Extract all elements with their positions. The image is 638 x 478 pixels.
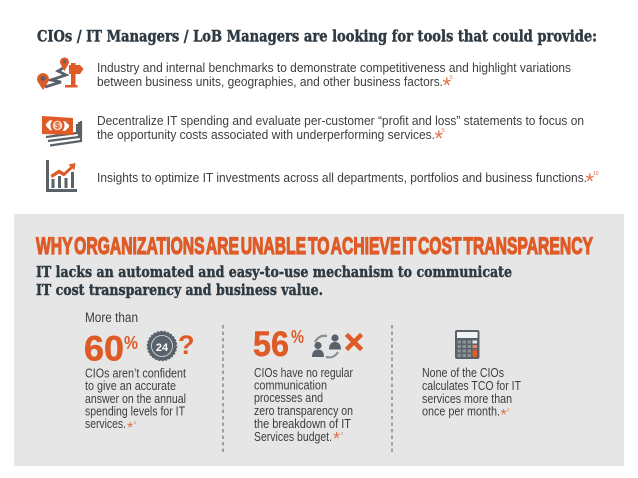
icon: orange cross (348, 336, 360, 348)
stat description: * (127, 420, 133, 437)
stat description: calculates TCO for IT (422, 378, 521, 393)
text: insights: 10 (593, 171, 599, 177)
text: decentralize spending: Decentralize IT spending and evaluate per-customer “profit and loss” statements to focus on (97, 113, 584, 128)
text: decentralize spending: * (434, 126, 444, 151)
stat: 60 percent: 60 (84, 330, 124, 368)
stat description (254, 365, 354, 449)
icon: 24 hours badge: 24 (156, 342, 169, 354)
text: decentralize spending: the opportunity costs associated with underperforming services. (97, 127, 435, 142)
divider (222, 325, 224, 455)
stat description: processes and (254, 390, 323, 405)
stat description: spending levels for IT (85, 404, 185, 418)
text: insights: * (586, 169, 594, 194)
icon: signpost with map pins (37, 57, 84, 90)
stat description: once per month. (422, 404, 500, 418)
icon: calculator (455, 330, 480, 359)
stat: 60 percent (84, 310, 194, 437)
text: decentralize spending (97, 113, 584, 151)
stat description: to give an accurate (85, 378, 176, 393)
stat description: answer on the annual (85, 391, 186, 406)
panel subheading: IT lacks an automated and easy-to-use mechanism to communicate (36, 264, 512, 281)
stat: 60 percent: More than (85, 310, 138, 325)
stat: 56 percent: % (291, 327, 304, 347)
icon: two people exchanging (312, 334, 341, 357)
text: benchmarks: 5 (450, 75, 453, 81)
stat: 60 percent: % (124, 333, 138, 353)
text: insights (97, 169, 599, 194)
stat description: zero transparency on (254, 403, 353, 418)
stat description: * (500, 407, 507, 424)
text: decentralize spending: 5 (442, 128, 445, 134)
text: benchmarks: Industry and internal benchmarks to demonstrate competitiveness and highlight variations (97, 60, 571, 75)
panel subheading: IT cost transparency and business value. (36, 282, 323, 299)
stat description: communication (254, 378, 327, 392)
stat description: services more than (422, 391, 512, 406)
panel: why organizations are unable (14, 214, 624, 466)
icon: stack of banknotes: $ (55, 121, 60, 131)
stat description: services. (85, 416, 126, 431)
stat description: * (333, 429, 340, 449)
section: tool benefits (37, 57, 599, 194)
stat description: CIOs have no regular (254, 365, 354, 380)
stat description: 4 (507, 407, 510, 412)
stat description: 4 (340, 431, 344, 436)
divider (391, 325, 393, 455)
stat description: Services budget. (254, 429, 332, 444)
stat description (85, 366, 186, 437)
text: benchmarks: between business units, geographies, and other business factors. (97, 74, 443, 89)
icon: stack of banknotes (42, 116, 81, 146)
icon: question mark: ? (178, 330, 194, 360)
stat: none of the CIOs (422, 330, 521, 424)
stat: 56 percent (253, 325, 360, 449)
stat description: the breakdown of IT (254, 416, 351, 431)
icon: rising bar chart (46, 160, 77, 192)
stat description: CIOs aren’t confident (85, 366, 186, 380)
text: benchmarks (97, 60, 571, 98)
stat description: 4 (134, 420, 136, 425)
text: insights: Insights to optimize IT investments across all departments, portfolios and business functions. (97, 170, 587, 185)
stat description: None of the CIOs (422, 365, 504, 380)
panel subheading (36, 264, 512, 299)
text: benchmarks: * (442, 73, 452, 98)
stat description (422, 365, 521, 424)
stat: 56 percent: 56 (253, 325, 289, 364)
